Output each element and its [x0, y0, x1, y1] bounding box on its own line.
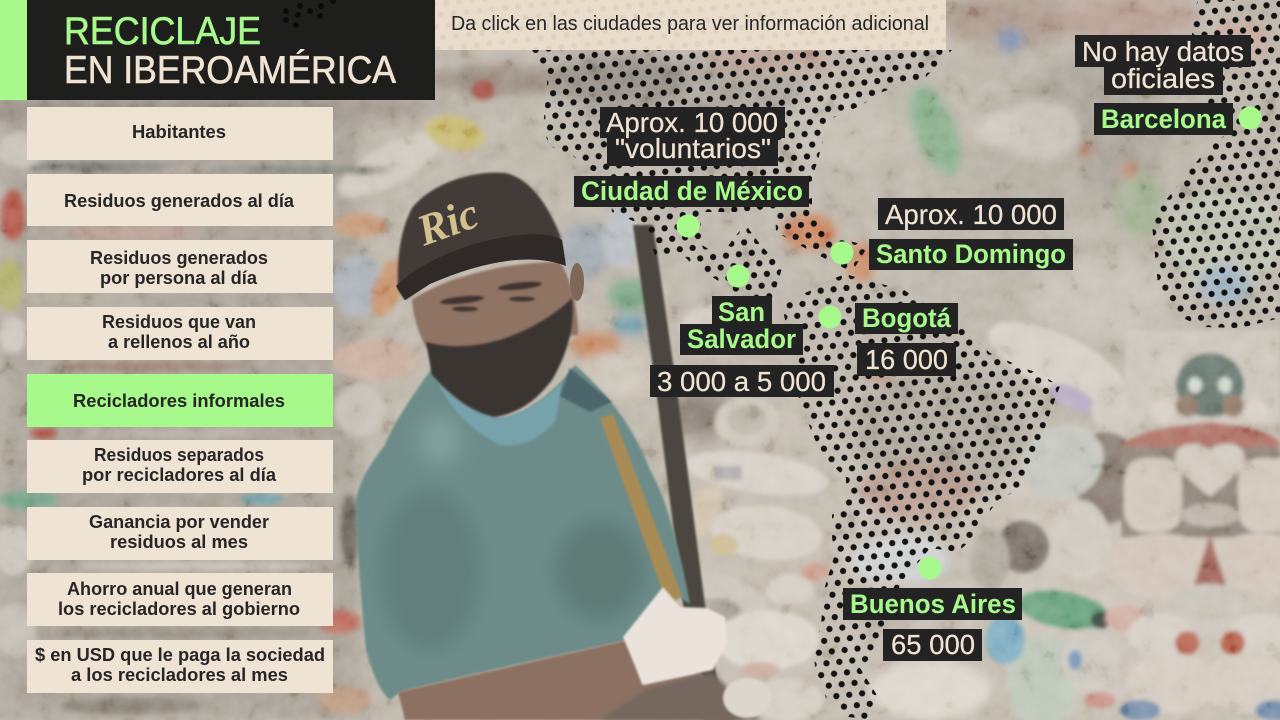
symmetric bottles lower right [970, 305, 1280, 720]
forearm [398, 640, 745, 720]
button: Residuos generados por persona al día: por persona al día [100, 268, 258, 288]
dot map: North and Central America [530, 50, 952, 302]
button: Residuos generados por persona al día [27, 240, 333, 293]
button: Residuos generados por persona al día: Residuos generados [90, 248, 268, 268]
button: Ahorro anual: los recicladores al gobierno [58, 599, 300, 619]
shirt [356, 365, 690, 700]
faint dots behind title [283, 0, 336, 28]
city: Buenos Aires: Buenos Aires [850, 589, 1016, 619]
city: Buenos Aires [843, 556, 1022, 661]
bottles at lower centre [682, 397, 831, 720]
instruction banner: Da click en las ciudades para ver información adicional [451, 13, 929, 35]
button: Residuos generados al día [27, 174, 333, 226]
cap brim [396, 234, 566, 300]
cap logo: Ric [410, 188, 485, 256]
city: Santo Domingo: Santo Domingo [876, 239, 1066, 269]
button: Recicladores informales (active) [27, 374, 333, 427]
city: Buenos Aires: 65 000 [891, 629, 975, 660]
instruction banner [435, 0, 946, 50]
button: Residuos separados por recicladores al día [27, 440, 333, 493]
city: Bogotá: Bogotá [862, 303, 952, 333]
title text: EN IBEROAMÉRICA [64, 49, 396, 92]
city: Ciudad de México [574, 107, 809, 238]
city: Santo Domingo [830, 198, 1073, 270]
button: Ahorro anual: Ahorro anual que generan [67, 579, 292, 599]
photo: waste picker with cap, mask, teal shirt, gloves and pole [356, 173, 771, 720]
pole [633, 225, 735, 720]
eyes [440, 280, 542, 312]
city: San Salvador: 3 000 a 5 000 [657, 366, 826, 397]
dot map: South America [782, 274, 1060, 719]
button: Ahorro anual [27, 573, 333, 626]
ear [570, 263, 584, 301]
title text [64, 10, 396, 92]
button: Residuos separados por recicladores al día: Residuos separados [94, 445, 264, 465]
button: Residuos que van a rellenos al año [27, 307, 333, 360]
city: San Salvador: Salvador [687, 324, 796, 354]
button: Recicladores informales (active): Recicladores informales [73, 391, 285, 411]
button: Ganancia por vender residuos al mes: residuos al mes [110, 532, 248, 552]
city: Santo Domingo: Aprox. 10 000 [885, 199, 1057, 230]
button: Ganancia por vender residuos al mes [27, 507, 333, 560]
city: Barcelona: No hay datos [1082, 36, 1244, 67]
button: Habitantes [27, 107, 333, 160]
title panel [27, 0, 435, 100]
wooden stick [600, 414, 682, 606]
city: San Salvador [650, 264, 834, 397]
header accent strip [0, 0, 27, 100]
city: Bogotá: 16 000 [865, 344, 948, 375]
button: $ en USD: $ en USD que le paga la sociedad [35, 645, 325, 665]
city: Ciudad de México: Aprox. 10 000 [606, 107, 778, 138]
menu: indicator buttons [27, 107, 333, 693]
button: Residuos separados por recicladores al día: por recicladores al día [82, 465, 277, 485]
glove [623, 587, 727, 685]
city: Bogotá [818, 303, 958, 376]
button: Ganancia por vender residuos al mes: Ganancia por vender [89, 512, 269, 532]
city: San Salvador: San [718, 297, 765, 327]
face [412, 262, 578, 352]
mask [426, 298, 573, 417]
city: Barcelona: oficiales [1111, 63, 1215, 94]
city: Ciudad de México: Ciudad de México [581, 176, 803, 206]
button: Residuos que van a rellenos al año: a rellenos al año [108, 332, 250, 352]
button: $ en USD [27, 640, 333, 693]
button: Habitantes: Habitantes [132, 122, 226, 142]
title text: RECICLAJE [64, 10, 261, 53]
button: $ en USD: a los recicladores al mes [71, 665, 288, 685]
city: Barcelona [1075, 35, 1262, 135]
bottles on the left [0, 80, 749, 714]
cap [398, 173, 565, 300]
city: Ciudad de México: "voluntarios" [615, 133, 771, 164]
city: Barcelona: Barcelona [1101, 104, 1227, 134]
button: Residuos generados al día: Residuos generados al día [64, 191, 295, 211]
button: Residuos que van a rellenos al año: Residuos que van [102, 312, 256, 332]
collar [432, 368, 562, 446]
dot map: Spain [1152, 0, 1280, 328]
